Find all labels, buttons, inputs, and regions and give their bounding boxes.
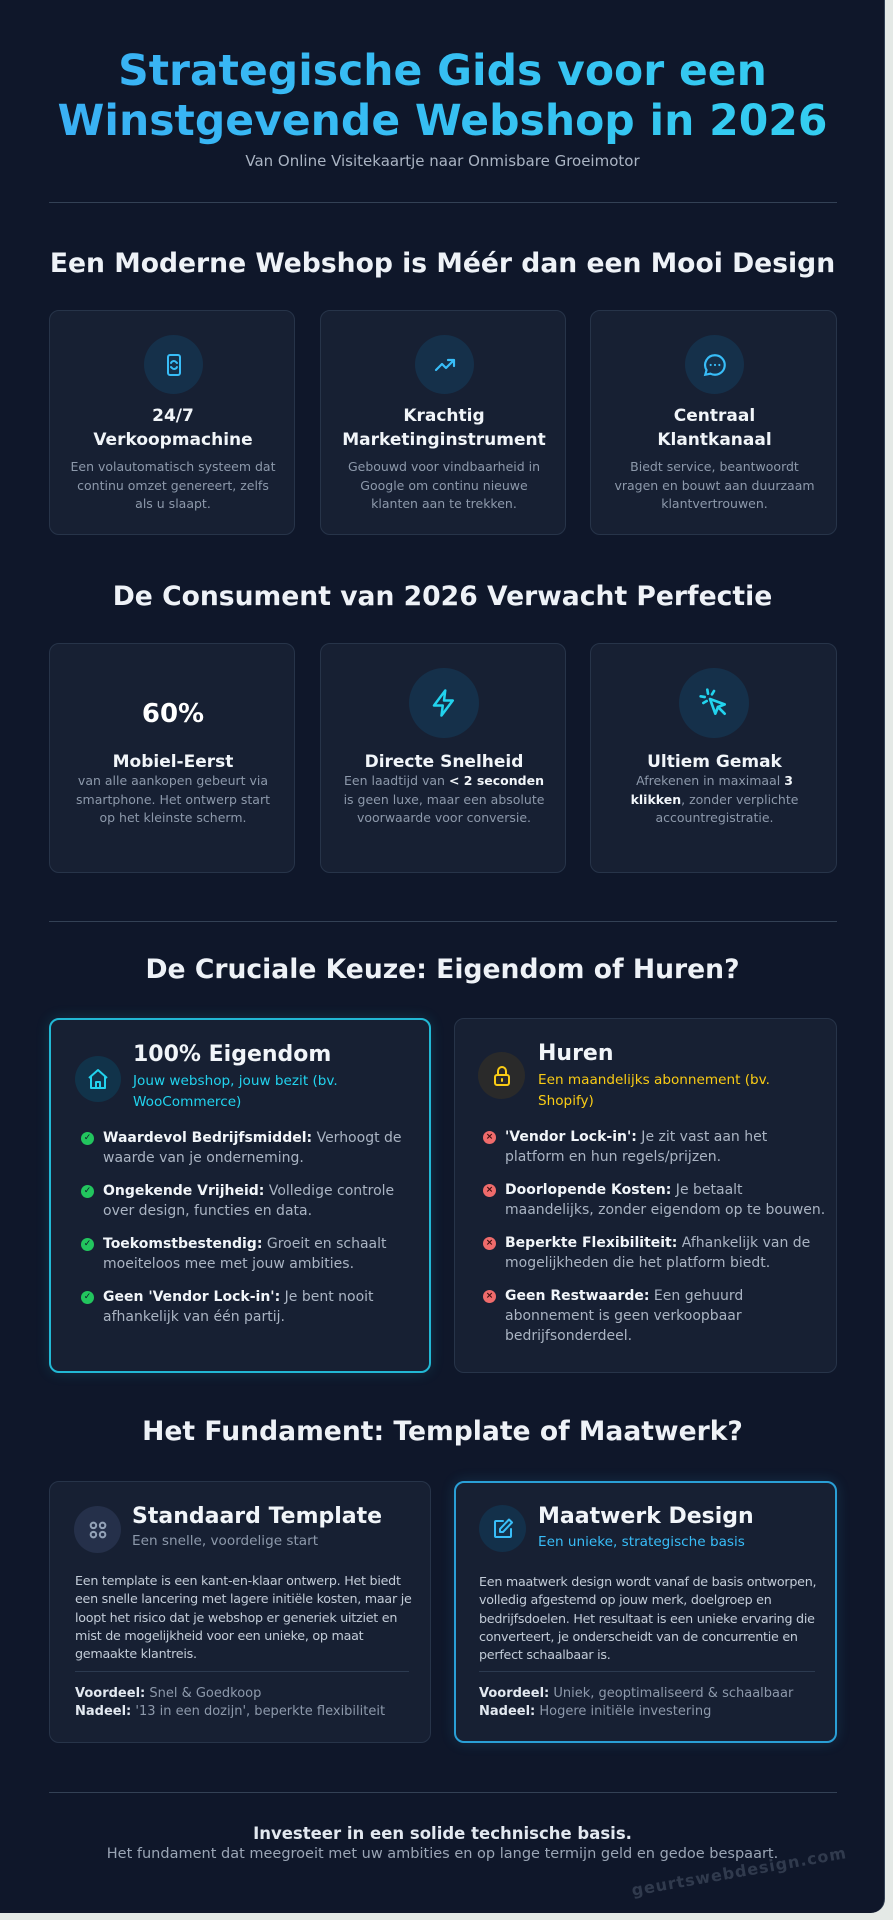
card text: Gebouwd voor vindbaarheid in Google om continu nieuwe klanten aan te trekken. bbox=[348, 459, 540, 511]
list: voordelen: ✓ bbox=[84, 1292, 91, 1302]
card title: Mobiel-Eerst bbox=[113, 752, 233, 772]
subtitle: Van Online Visitekaartje naar Onmisbare Groeimotor bbox=[245, 152, 640, 170]
card title bbox=[342, 406, 546, 450]
body text: Een template is een kant-en-klaar ontwerp. Het biedt een snelle lancering met lagere initiële kosten, maar je loopt het risico dat je webshop er generiek uitziet en mist de mogelijkheid voor een unieke, op maat gemaakte klantreis. bbox=[75, 1573, 412, 1661]
panel: standaard template bbox=[49, 1481, 431, 1743]
list: nadelen bbox=[483, 1129, 825, 1344]
card: ultiem gemak bbox=[590, 643, 837, 873]
icon: lock bbox=[478, 1052, 525, 1099]
list: voordelen: Geen 'Vendor Lock-in': Je bent nooit afhankelijk van één partij. bbox=[103, 1289, 374, 1325]
footer: conclusion bbox=[107, 1824, 778, 1862]
list: nadelen: Beperkte Flexibiliteit: Afhankelijk van de mogelijkheden die het platform biedt. bbox=[505, 1235, 810, 1271]
footer: conclusion: Investeer in een solide technische basis. bbox=[253, 1824, 632, 1843]
title bbox=[0, 47, 885, 147]
icon: lightning bbox=[409, 668, 479, 738]
card text: van alle aankopen gebeurt via smartphone. Het ontwerp start op het kleinste scherm. bbox=[76, 773, 270, 825]
card text: Een volautomatisch systeem dat continu omzet genereert, zelfs als u slaapt. bbox=[70, 459, 275, 511]
icon: grid bbox=[74, 1506, 121, 1553]
panel title: 100% Eigendom bbox=[133, 1042, 331, 1067]
body text: Een maatwerk design wordt vanaf de basis ontworpen, volledig afgestemd op jouw merk, doelgroep en bedrijfsdoelen. Het resultaat is een unieke ervaring die converteert, je onderscheidt van de concurrentie en perfect schaalbaar is. bbox=[479, 1574, 816, 1662]
card title: Marketinginstrument bbox=[342, 430, 546, 450]
panel subtitle: Een maandelijks abonnement (bv. Shopify) bbox=[538, 1072, 770, 1109]
title: Winstgevende Webshop in 2026 bbox=[58, 97, 827, 146]
pros and cons: Nadeel: '13 in een dozijn', beperkte flexibiliteit bbox=[75, 1704, 385, 1719]
list: nadelen: × bbox=[486, 1132, 493, 1142]
list: voordelen bbox=[81, 1130, 402, 1325]
panel subtitle: Jouw webshop, jouw bezit (bv. WooCommerce) bbox=[133, 1073, 338, 1110]
card: mobiel-eerst bbox=[49, 643, 295, 873]
card title: Verkoopmachine bbox=[93, 430, 253, 450]
card title: Ultiem Gemak bbox=[647, 752, 782, 772]
card text: Biedt service, beantwoordt vragen en bouwt aan duurzaam klantvertrouwen. bbox=[614, 459, 815, 511]
panel: eigendom bbox=[49, 1018, 431, 1373]
card title: 24/7 bbox=[152, 406, 194, 426]
card: klantkanaal bbox=[590, 310, 837, 535]
icon: edit bbox=[479, 1505, 526, 1552]
card title: Centraal bbox=[674, 406, 755, 426]
heading: consument 2026: De Consument van 2026 Verwacht Perfectie bbox=[113, 581, 772, 612]
panel title: Maatwerk Design bbox=[538, 1504, 754, 1529]
pros and cons bbox=[75, 1686, 385, 1719]
panel subtitle: Een unieke, strategische basis bbox=[538, 1534, 745, 1550]
heading: eigendom of huren: De Cruciale Keuze: Eigendom of Huren? bbox=[145, 954, 740, 985]
card title bbox=[657, 406, 772, 450]
watermark: geurtswebdesign.com bbox=[630, 1843, 848, 1900]
icon: phone sync bbox=[144, 335, 203, 394]
title: Strategische Gids voor een bbox=[118, 47, 767, 96]
list: voordelen: Ongekende Vrijheid: Volledige controle over design, functies en data. bbox=[103, 1183, 394, 1219]
heading: moderne webshop: Een Moderne Webshop is Méér dan een Mooi Design bbox=[50, 248, 835, 279]
heading: template of maatwerk: Het Fundament: Template of Maatwerk? bbox=[142, 1416, 743, 1447]
card text: Afrekenen in maximaal 3 klikken, zonder verplichte accountregistratie. bbox=[631, 773, 798, 825]
panel: maatwerk design bbox=[454, 1481, 837, 1743]
panel title: Huren bbox=[538, 1041, 614, 1066]
list: nadelen: × bbox=[486, 1185, 493, 1195]
pros and cons: Nadeel: Hogere initiële investering bbox=[479, 1704, 711, 1719]
stat: 60%: 60% bbox=[142, 699, 204, 729]
list: voordelen: ✓ bbox=[84, 1186, 91, 1196]
card title: Klantkanaal bbox=[657, 430, 772, 450]
card: 24/7 verkoopmachine bbox=[49, 310, 295, 535]
pros and cons: Voordeel: Snel & Goedkoop bbox=[75, 1686, 261, 1701]
list: voordelen: ✓ bbox=[84, 1133, 91, 1143]
panel title: Standaard Template bbox=[132, 1504, 382, 1529]
list: nadelen: 'Vendor Lock-in': Je zit vast aan het platform en hun regels/prijzen. bbox=[505, 1129, 767, 1165]
list: voordelen: Waardevol Bedrijfsmiddel: Verhoogt de waarde van je onderneming. bbox=[103, 1130, 402, 1166]
icon: chat bbox=[685, 335, 744, 394]
icon: house bbox=[75, 1056, 121, 1102]
list: nadelen: × bbox=[486, 1238, 493, 1248]
list: nadelen: Doorlopende Kosten: Je betaalt maandelijks, zonder eigendom op te bouwen. bbox=[505, 1182, 825, 1218]
panel subtitle: Een snelle, voordelige start bbox=[132, 1533, 318, 1549]
icon: cursor click bbox=[679, 668, 749, 738]
card: marketinginstrument bbox=[320, 310, 566, 535]
card: directe snelheid bbox=[320, 643, 566, 873]
list: nadelen: Geen Restwaarde: Een gehuurd abonnement is geen verkoopbaar bedrijfsonderdeel. bbox=[505, 1288, 743, 1344]
card title: Krachtig bbox=[403, 406, 485, 426]
pros and cons: Voordeel: Uniek, geoptimaliseerd & schaalbaar bbox=[479, 1686, 793, 1701]
card text: Een laadtijd van < 2 seconden is geen luxe, maar een absolute voorwaarde voor conversie. bbox=[344, 773, 544, 825]
panel: huren bbox=[454, 1018, 837, 1373]
list: voordelen: Toekomstbestendig: Groeit en schaalt moeiteloos mee met jouw ambities. bbox=[103, 1236, 387, 1272]
list: nadelen: × bbox=[486, 1291, 493, 1301]
icon: trending up bbox=[415, 335, 474, 394]
list: voordelen: ✓ bbox=[84, 1239, 91, 1249]
card title: Directe Snelheid bbox=[365, 752, 523, 772]
footer: conclusion: Het fundament dat meegroeit met uw ambities en op lange termijn geld en gedoe bespaart. bbox=[107, 1846, 778, 1862]
card title bbox=[93, 406, 253, 450]
pros and cons bbox=[479, 1686, 794, 1719]
